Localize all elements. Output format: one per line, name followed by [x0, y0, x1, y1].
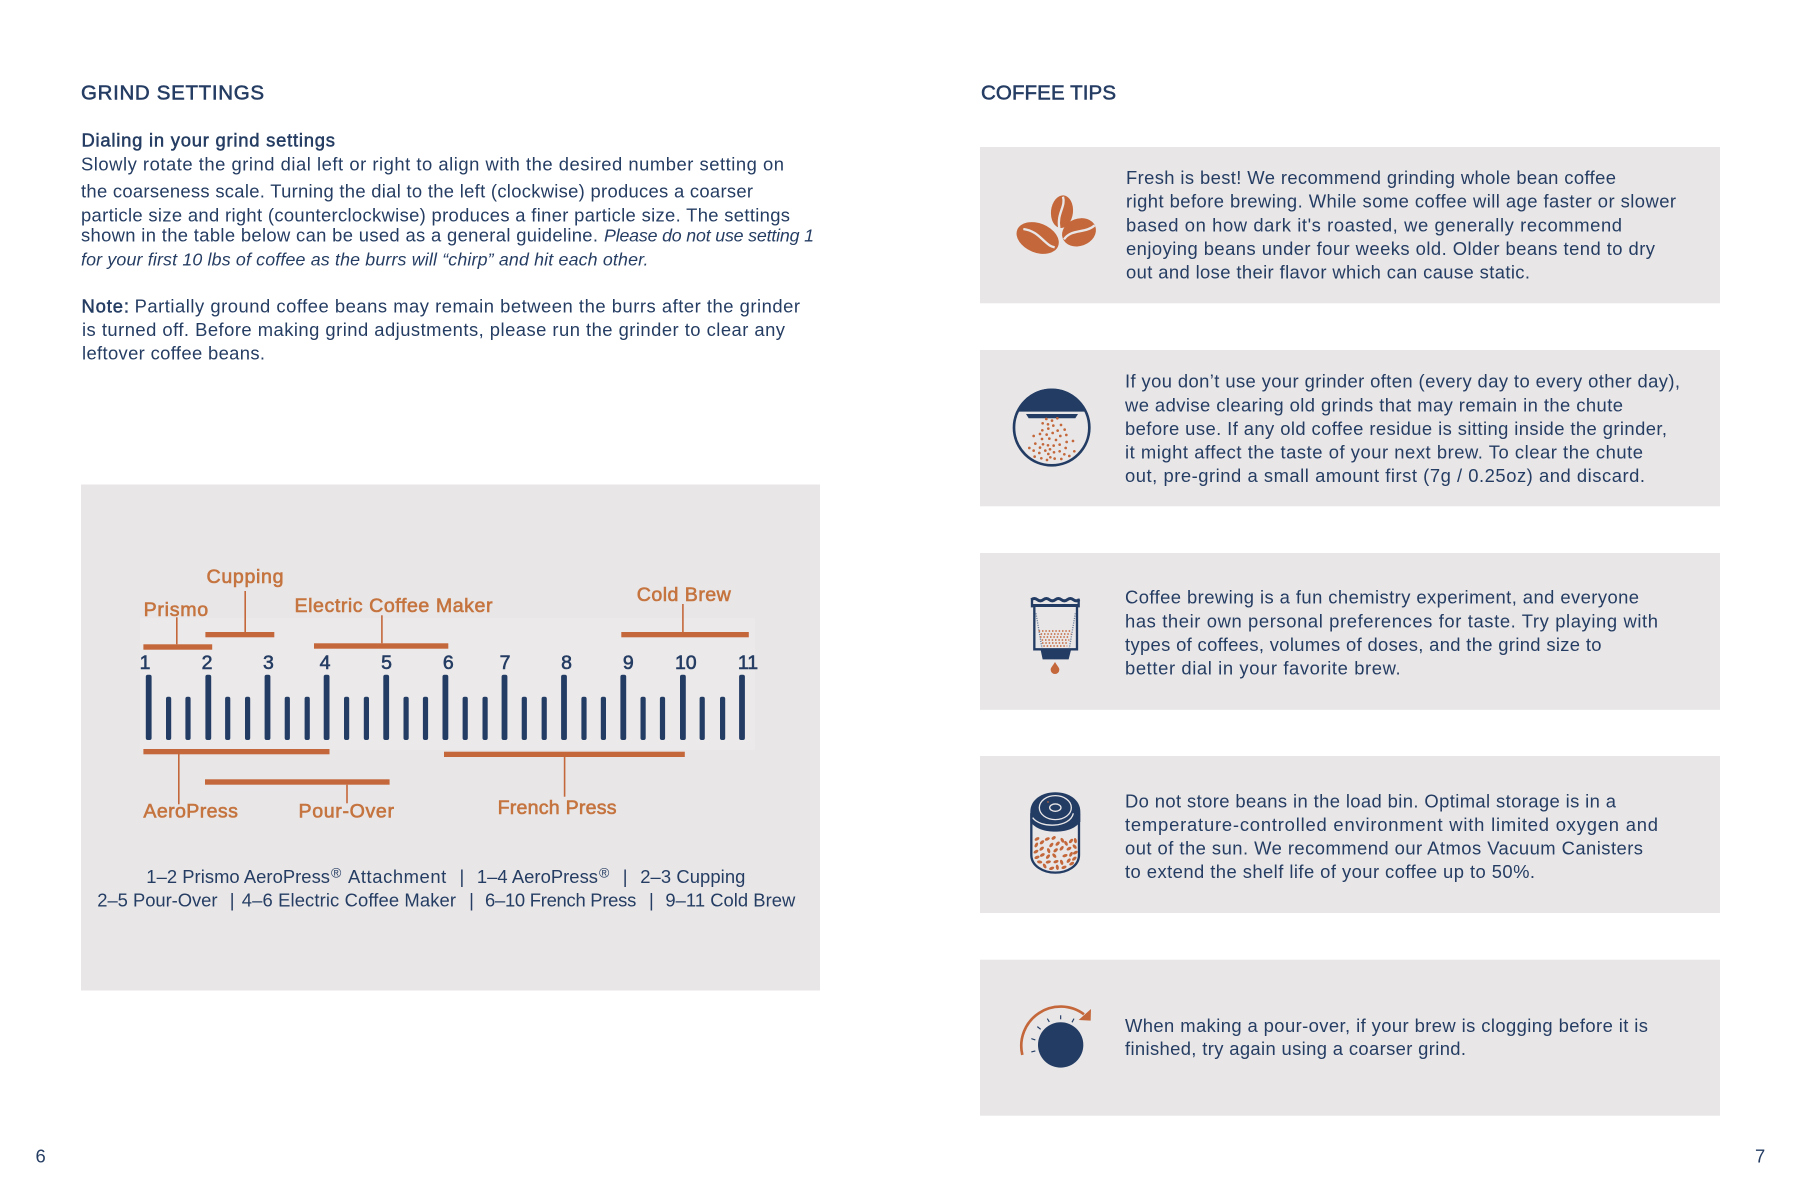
tip text: before use. If any old coffee residue is sitting inside the grinder,	[1125, 418, 1667, 439]
scale numbers: 3	[263, 652, 274, 674]
range: cupping	[205, 566, 284, 637]
range: cupping: Cupping	[206, 566, 284, 588]
legend text: ®	[331, 865, 342, 881]
heading: grind settings: GRIND SETTINGS	[81, 81, 264, 104]
icon: vacuum canister	[1030, 792, 1080, 873]
paragraph: instructions: shown in the table below can be used as a general guideline.	[81, 224, 598, 245]
paragraph: instructions: Please do not use setting 1	[604, 225, 814, 245]
legend text: |	[469, 889, 474, 910]
range: french press: French Press	[498, 797, 617, 819]
range: aeropress	[143, 749, 330, 822]
tip text: to extend the shelf life of your coffee up to 50%.	[1125, 861, 1535, 882]
tip text	[1124, 371, 1680, 486]
range: pour-over	[205, 779, 394, 822]
range: aeropress: AeroPress	[143, 800, 238, 822]
tip text: it might affect the taste of your next brew. To clear the chute	[1125, 442, 1643, 463]
legend text: |	[649, 889, 654, 910]
range: prismo	[143, 599, 212, 650]
panel: tip clear old grinds	[980, 350, 1720, 506]
paragraph: note: Note:	[82, 295, 129, 316]
legend text: |	[230, 889, 234, 910]
range: electric coffee maker: Electric Coffee Maker	[294, 595, 493, 617]
range: pour-over: Pour-Over	[298, 800, 394, 822]
tip text: Coffee brewing is a fun chemistry experiment, and everyone	[1125, 587, 1639, 608]
tip text: based on how dark it's roasted, we generally recommend	[1126, 214, 1622, 235]
panel: tip bean storage	[980, 756, 1720, 913]
tip text: right before brewing. While some coffee will age faster or slower	[1126, 191, 1676, 212]
legend text: 2–3 Cupping	[640, 866, 745, 887]
tip text	[1125, 1015, 1648, 1059]
scale numbers: 4	[320, 652, 331, 674]
tip text: out of the sun. We recommend our Atmos Vacuum Canisters	[1125, 838, 1643, 859]
paragraph: note: Partially ground coffee beans may remain between the burrs after the grinder	[135, 295, 800, 316]
paragraph: note: leftover coffee beans.	[82, 342, 265, 363]
icon: grinder chute with falling grounds	[1014, 388, 1089, 465]
paragraph: instructions: for your first 10 lbs of coffee as the burrs will “chirp” and hit each other.	[81, 249, 648, 269]
heading: coffee tips: COFFEE TIPS	[981, 81, 1116, 104]
range: electric coffee maker	[294, 595, 493, 649]
tip text: When making a pour-over, if your brew is clogging before it is	[1125, 1015, 1648, 1036]
tip text: Do not store beans in the load bin. Optimal storage is in a	[1125, 790, 1617, 811]
legend text	[97, 865, 796, 910]
paragraph: instructions: the coarseness scale. Turning the dial to the left (clockwise) produces a coarser	[81, 180, 753, 201]
paragraph: instructions: Slowly rotate the grind dial left or right to align with the desired number setting on	[81, 153, 784, 174]
tip text: we advise clearing old grinds that may remain in the chute	[1124, 394, 1623, 415]
tip text: out, pre-grind a small amount first (7g / 0.25oz) and discard.	[1125, 465, 1645, 486]
tip text: out and lose their flavor which can cause static.	[1126, 262, 1530, 283]
tip text: temperature-controlled environment with limited oxygen and	[1125, 814, 1658, 835]
scale ticks	[146, 675, 745, 740]
paragraph: note: is turned off. Before making grind adjustments, please run the grinder to clear any	[82, 319, 786, 340]
scale numbers: 8	[561, 652, 572, 674]
legend text: 1–4 AeroPress	[477, 866, 598, 887]
icon: dial with arrow	[1021, 1007, 1091, 1068]
legend text: 2–5 Pour-Over	[97, 889, 218, 910]
legend text: ®	[599, 865, 610, 881]
tip text: If you don’t use your grinder often (every day to every other day),	[1125, 371, 1680, 392]
page number 6: 6	[36, 1146, 46, 1166]
icon: brewer with drip	[1031, 598, 1079, 674]
range: prismo: Prismo	[144, 599, 208, 621]
tip text	[1125, 587, 1658, 678]
tip text: types of coffees, volumes of doses, and the grind size to	[1125, 634, 1602, 655]
scale numbers: 7	[500, 652, 510, 674]
scale numbers: 6	[443, 652, 454, 674]
range: cold brew	[621, 584, 749, 637]
scale numbers: 9	[623, 652, 634, 674]
panel: grind scale	[81, 484, 820, 990]
scale numbers	[140, 652, 758, 674]
legend text: Attachment	[348, 866, 446, 887]
legend text: |	[623, 866, 628, 887]
tip text	[1125, 790, 1658, 882]
icon: coffee beans	[1012, 194, 1100, 260]
tip text: enjoying beans under four weeks old. Older beans tend to dry	[1126, 238, 1656, 259]
panel: tip chemistry experiment	[980, 553, 1720, 710]
legend text: 4–6 Electric Coffee Maker	[242, 889, 456, 910]
range: french press	[444, 752, 685, 819]
scale numbers: 5	[381, 652, 392, 674]
tip text	[1126, 167, 1676, 283]
tip text: better dial in your favorite brew.	[1125, 657, 1401, 678]
page number 7: 7	[1755, 1146, 1765, 1166]
legend text: |	[460, 866, 464, 887]
panel: tip pour-over clogging	[980, 960, 1720, 1116]
panel: tip fresh beans	[980, 147, 1720, 303]
tip text: has their own personal preferences for taste. Try playing with	[1125, 610, 1658, 631]
paragraph: instructions: particle size and right (counterclockwise) produces a finer particle size. The settings	[81, 204, 790, 225]
subheading: Dialing in your grind settings	[82, 129, 335, 150]
scale numbers: 1	[140, 652, 150, 674]
tip text: Fresh is best! We recommend grinding whole bean coffee	[1126, 167, 1616, 188]
scale numbers: 2	[202, 652, 212, 674]
text block: dialing in your grind settings	[81, 129, 814, 363]
scale numbers: 11	[738, 652, 758, 674]
legend text: 1–2 Prismo AeroPress	[146, 866, 330, 887]
paragraph: instructions	[81, 153, 814, 269]
scale numbers: 10	[675, 652, 697, 674]
legend text: 9–11 Cold Brew	[665, 889, 796, 910]
legend text: 6–10 French Press	[485, 889, 636, 910]
paragraph: note	[82, 295, 800, 363]
tip text: finished, try again using a coarser grind.	[1125, 1038, 1466, 1059]
range: cold brew: Cold Brew	[637, 584, 732, 606]
